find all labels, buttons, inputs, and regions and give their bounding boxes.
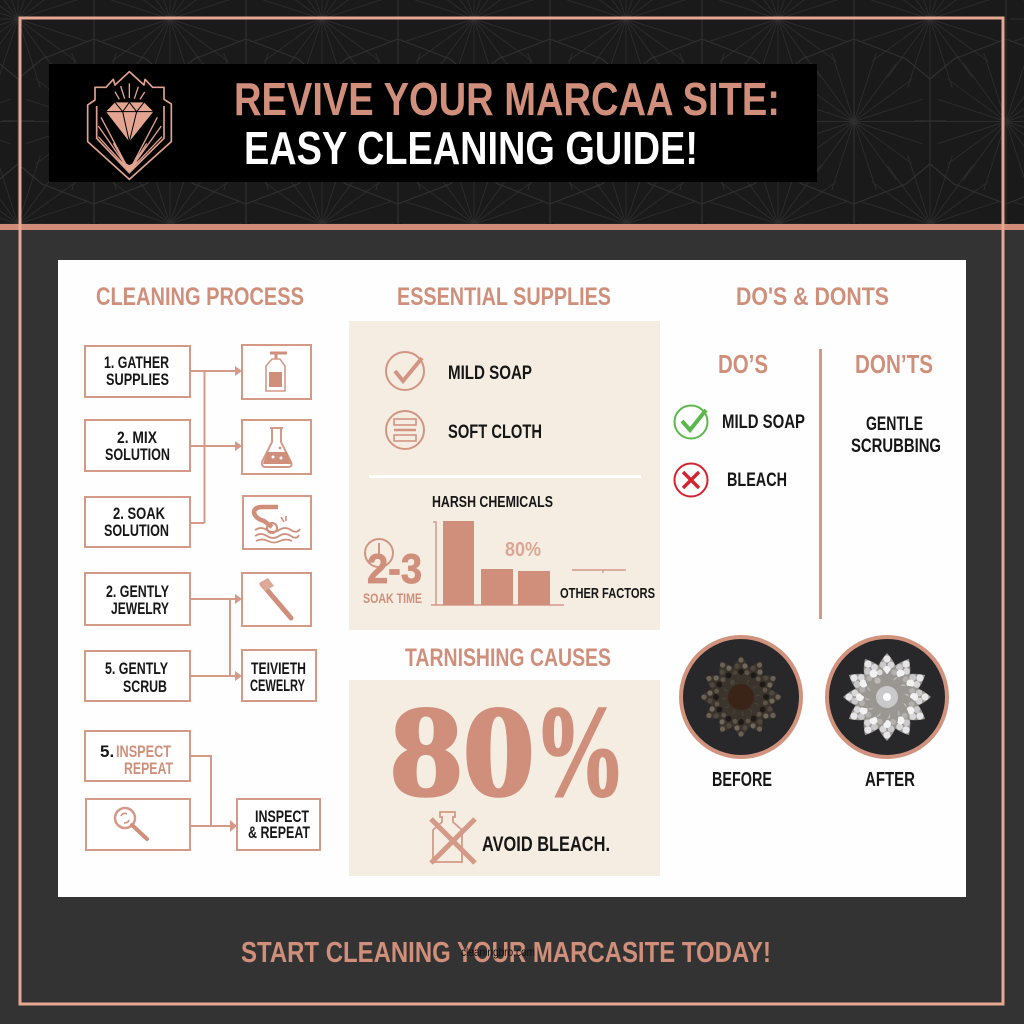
box: tevieth cewelry: CEWELRY bbox=[250, 676, 305, 695]
step: inspect repeat: 5. bbox=[100, 742, 114, 761]
icon: diamond crest logo bbox=[88, 72, 171, 179]
rose gold header rule bbox=[0, 224, 1024, 230]
footer watermark: cleaningbro.com bbox=[461, 945, 535, 959]
step: gently jewelry: JEWELRY bbox=[111, 599, 169, 618]
heading: essential supplies: ESSENTIAL SUPPLIES bbox=[397, 283, 611, 311]
box: tevieth cewelry bbox=[242, 650, 316, 701]
stat: 80 percent bbox=[390, 680, 626, 824]
step: soak solution: 2. SOAK bbox=[113, 504, 166, 523]
stat: 80 percent: % bbox=[534, 680, 626, 824]
label: mild soap: MILD SOAP bbox=[448, 363, 532, 384]
supplies beige card bbox=[349, 321, 660, 630]
panel: dos and donts bbox=[674, 283, 947, 791]
box: inspect and repeat: & REPEAT bbox=[248, 823, 310, 842]
step: gather supplies: 1. GATHER bbox=[104, 353, 169, 372]
panel: cleaning process bbox=[85, 283, 320, 850]
icon: cloth stack circle bbox=[386, 411, 424, 449]
stat: soak time: 2-3 bbox=[367, 545, 422, 592]
heading: donts: DON’TS bbox=[855, 349, 933, 379]
step: mix solution bbox=[85, 420, 190, 471]
step: inspect repeat: REPEAT bbox=[124, 759, 173, 778]
stat: 80 percent: 80 bbox=[390, 680, 535, 824]
step: mix solution: 2. MIX bbox=[117, 428, 158, 447]
step: inspect repeat: INSPECT bbox=[116, 742, 171, 761]
label: do mild soap: MILD SOAP bbox=[722, 412, 805, 433]
label: bleach: BLEACH bbox=[727, 470, 787, 491]
label: avoid bleach: AVOID BLEACH. bbox=[482, 833, 610, 856]
icon box: toothbrush bbox=[242, 573, 311, 626]
panel: tarnishing causes bbox=[349, 644, 660, 876]
connector lines group three bbox=[190, 756, 237, 832]
step: gently jewelry bbox=[85, 573, 190, 625]
label: soft cloth: SOFT CLOTH bbox=[448, 422, 542, 443]
label: soak time: SOAK TIME bbox=[363, 590, 422, 606]
step: gather supplies bbox=[85, 346, 190, 397]
step: gently scrub: SCRUB bbox=[123, 677, 167, 696]
step: gently jewelry: 2. GENTLY bbox=[106, 582, 169, 601]
heading: dos: DO’S bbox=[718, 349, 768, 379]
icon: crossed bleach bottle bbox=[431, 812, 475, 863]
icon box: soaking jewelry bbox=[243, 496, 311, 549]
white content panel bbox=[58, 260, 966, 897]
column divider bbox=[819, 349, 822, 619]
divider bbox=[369, 475, 641, 478]
label: 80 percent: 80% bbox=[505, 539, 541, 561]
icon: red cross bbox=[674, 464, 708, 496]
label: after: AFTER bbox=[865, 769, 915, 791]
legend tick line bbox=[572, 570, 626, 573]
icon box: pump bottle bbox=[242, 345, 311, 399]
step: gently scrub: 5. GENTLY bbox=[105, 659, 168, 678]
step: inspect repeat bbox=[85, 731, 190, 781]
label: harsh chemicals: HARSH CHEMICALS bbox=[432, 494, 553, 511]
connector lines group one bbox=[190, 366, 242, 523]
step: gently scrub bbox=[85, 651, 190, 701]
icon box: flask bbox=[242, 420, 311, 474]
panel: essential supplies bbox=[349, 283, 660, 630]
step: mix solution: SOLUTION bbox=[105, 445, 170, 464]
tarnishing beige card bbox=[349, 680, 660, 876]
label: other factors: OTHER FACTORS bbox=[560, 585, 655, 602]
connector lines group two bbox=[190, 594, 242, 681]
footer call to action: START CLEANING YOUR MARCASITE TODAY! bbox=[241, 937, 771, 969]
icon: soak clock bbox=[365, 539, 393, 567]
title banner bbox=[49, 64, 817, 182]
title line one: REVIVE YOUR MARCAA SITE: bbox=[234, 73, 780, 125]
image: clean brooch after bbox=[827, 637, 947, 757]
icon: green check bbox=[674, 406, 708, 438]
icon box: magnifier bbox=[86, 799, 190, 850]
image: tarnished brooch before bbox=[681, 637, 801, 757]
heading: dos and donts: DO'S & DONTS bbox=[736, 283, 889, 311]
label: gentle scrubbing: GENTLE bbox=[866, 414, 923, 435]
step: gather supplies: SUPPLIES bbox=[106, 370, 169, 389]
header art deco pattern band bbox=[0, 0, 1024, 224]
title line two: EASY CLEANING GUIDE! bbox=[244, 122, 698, 174]
box: inspect and repeat: INSPECT bbox=[255, 807, 309, 826]
label: before: BEFORE bbox=[712, 769, 772, 791]
box: tevieth cewelry: TEIVIETH bbox=[251, 659, 306, 678]
heading: tarnishing causes: TARNISHING CAUSES bbox=[405, 644, 611, 672]
heading: cleaning process: CLEANING PROCESS bbox=[96, 283, 304, 311]
bar chart bbox=[431, 521, 564, 605]
box: inspect and repeat bbox=[237, 799, 320, 850]
step: soak solution: SOLUTION bbox=[104, 521, 169, 540]
icon: check circle bbox=[386, 352, 424, 390]
step: soak solution bbox=[85, 497, 190, 547]
label: gentle scrubbing bbox=[851, 414, 941, 457]
label: gentle scrubbing: SCRUBBING bbox=[851, 436, 941, 457]
